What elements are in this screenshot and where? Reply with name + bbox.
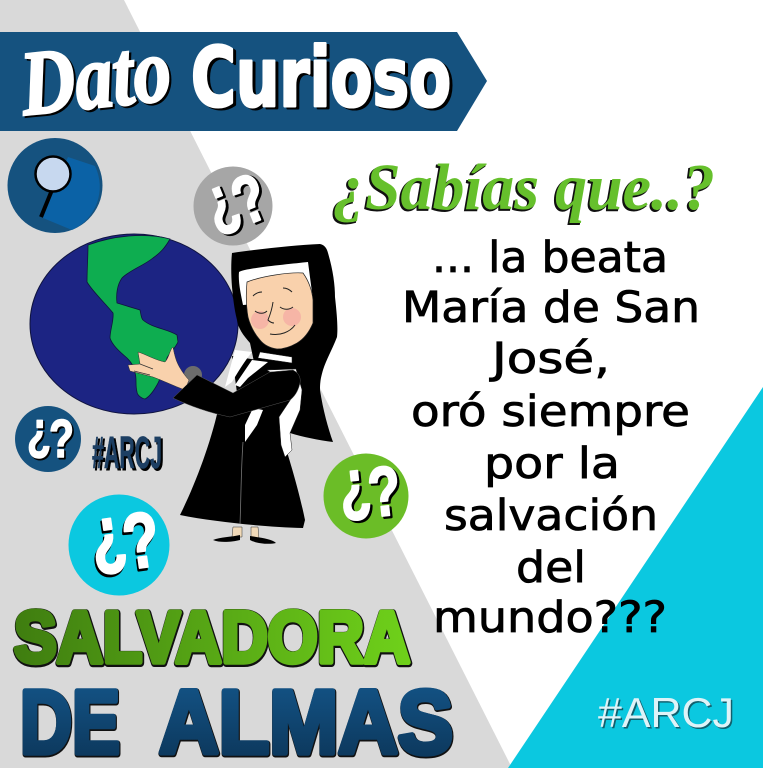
scapular centre white [235, 360, 268, 387]
body text: mundo??? [433, 593, 667, 643]
body text: José, [489, 334, 610, 384]
hashtag: ARCJ navy [92, 427, 164, 480]
skirt seam [240, 442, 243, 524]
icon: gray question badge: ? [221, 159, 278, 240]
icon: navy question badge [15, 401, 81, 472]
hand [128, 347, 189, 390]
headline: SALVADORA: SALVADORA [14, 599, 410, 679]
icon: cyan question badge: ¿ [84, 487, 131, 579]
body text: María de San [402, 283, 700, 333]
elbow [184, 366, 202, 384]
icon: magnifying glass badge [8, 138, 102, 233]
icon: navy question badge: ? [49, 409, 74, 469]
icon: cyan question badge: ? [116, 497, 164, 589]
continent: the Americas [87, 235, 178, 399]
arm sleeve [173, 370, 300, 417]
face [246, 273, 313, 349]
icon: cyan question badge: ¿ [83, 490, 130, 582]
body text: salvación [444, 491, 658, 541]
icon: navy question badge: ¿ [27, 401, 51, 461]
heading: Sabías que: ¿Sabías que..? [333, 151, 715, 224]
cheeks [251, 311, 269, 329]
shoes [213, 535, 276, 544]
icon: gray question badge: ? [224, 160, 281, 241]
heading: Sabías que: ¿Sabías que..? [332, 152, 714, 226]
hashtag: ARCJ white: #ARCJ [598, 689, 734, 736]
body text: por la [484, 439, 620, 489]
scapular left white [225, 350, 252, 387]
icon: cyan question badge [68, 483, 170, 596]
facial features [253, 288, 295, 335]
icon: navy question badge: ? [50, 410, 76, 470]
icon: gray question badge: ¿ [194, 162, 250, 242]
hashtag: ARCJ white: #ARCJ [600, 690, 736, 738]
body text: ... la beata [432, 233, 668, 283]
veil [231, 244, 337, 442]
icon: gray question badge [192, 149, 281, 252]
infographic canvas: #ARCJ [94, 429, 164, 480]
icon: green question badge [324, 440, 408, 538]
icon: cyan question badge: ? [117, 494, 165, 586]
title: Curioso: Curioso [194, 33, 454, 128]
body text: del [516, 543, 586, 593]
legs [232, 527, 259, 539]
title: Curioso: Curioso [191, 31, 451, 126]
icon: gray question badge: ¿ [192, 161, 248, 241]
scapular lower white [245, 408, 263, 442]
habit skirt [180, 407, 305, 528]
icon: navy question badge: ¿ [28, 402, 52, 462]
headline: DE ALMAS [20, 673, 454, 768]
body text: oró siempre [411, 387, 690, 437]
headline: SALVADORA: SALVADORA [14, 598, 410, 678]
icon: green question badge: ¿ [335, 443, 374, 525]
coif [239, 262, 313, 305]
icon: green question badge: ? [364, 450, 405, 532]
collar [258, 352, 292, 363]
title: Dato: Dato [15, 18, 175, 135]
chest black [232, 356, 298, 415]
finger lines [134, 364, 153, 375]
body text [402, 233, 700, 643]
background: gray diagonal panel [0, 0, 512, 768]
icon: green question badge: ¿ [337, 445, 376, 526]
title banner [0, 18, 487, 137]
globe illustration [30, 234, 238, 414]
infographic canvas: #ARCJ [92, 427, 162, 478]
title: Dato: Dato [17, 20, 178, 137]
background: cyan triangle [508, 387, 763, 768]
icon: green question badge: ? [366, 452, 407, 534]
illustration: nun hugging the globe [128, 244, 337, 544]
cape right white [267, 369, 302, 457]
